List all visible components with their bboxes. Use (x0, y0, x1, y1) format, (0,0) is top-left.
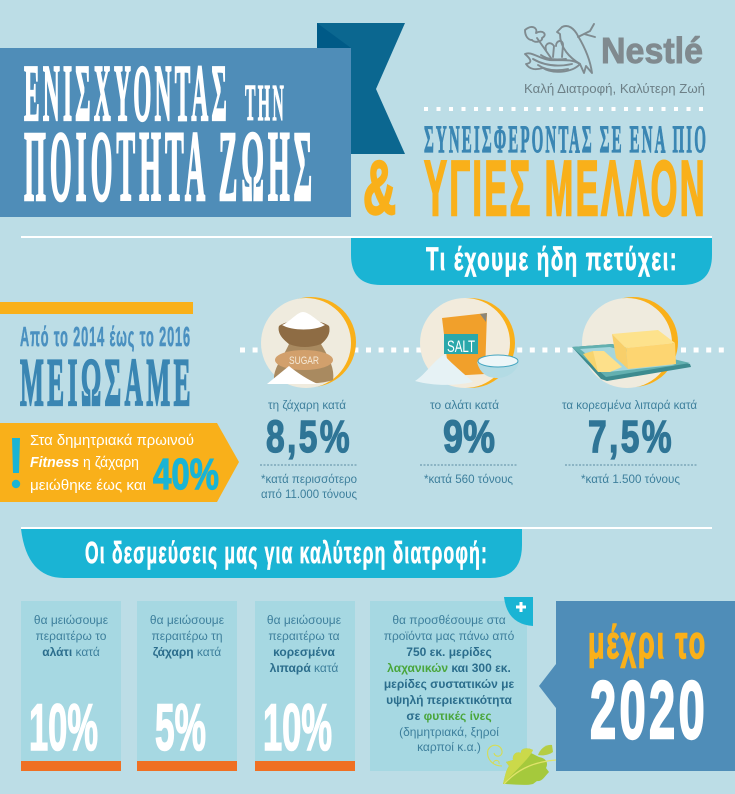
title ribbon (0, 23, 405, 222)
Nestlé logo (524, 24, 705, 96)
note: *κατά 1.500 τόνους (581, 472, 680, 486)
label: τη ζάχαρη κατά (268, 398, 346, 412)
card text (267, 613, 342, 675)
card text: λαχανικών και 300 εκ. (387, 661, 511, 675)
card text: μερίδες συστατικών με (384, 677, 514, 691)
icon: butter dish (572, 297, 691, 388)
dotted connector (240, 348, 728, 352)
card text (384, 613, 515, 754)
card text: ζάχαρη κατά (153, 645, 221, 659)
wordmark: Nestlé (601, 30, 703, 71)
item: saturated fats (562, 297, 697, 486)
card text: αλάτι κατά (42, 645, 100, 659)
card: salt commitment (21, 601, 121, 771)
card text (34, 613, 109, 659)
card text: θα μειώσουμε (34, 613, 109, 627)
card text (150, 613, 225, 659)
card text: υψηλή περιεκτικότητα (386, 693, 513, 707)
icon: salt box (415, 298, 519, 388)
icon: salt box: SALT (447, 337, 475, 356)
card text: περαιτέρω τα (268, 629, 340, 643)
figure: 8,5% (266, 411, 352, 462)
card: additions (370, 597, 533, 771)
card text: περαιτέρω τη (151, 629, 223, 643)
note: *κατά περισσότερο (261, 472, 357, 486)
title ribbon: ΕΝΙΣΧΥΟΝΤΑΣ (24, 50, 230, 138)
icon: sugar sack (261, 297, 356, 388)
item: salt (415, 298, 519, 486)
card text: προϊόντα μας πάνω από (384, 629, 515, 643)
callout text: μειώθηκε έως και (30, 478, 146, 494)
ribbon body (0, 48, 351, 217)
icon: plus tag (504, 597, 533, 626)
card text: σε φυτικές ίνες (406, 709, 492, 723)
note: *κατά 560 τόνους (424, 472, 513, 486)
icon: bird nest (525, 24, 595, 73)
orange bar (0, 302, 193, 314)
dotted separator: top (424, 107, 706, 111)
title text (24, 50, 316, 222)
label: το αλάτι κατά (430, 398, 499, 412)
card: sugar commitment (137, 601, 237, 771)
icon: sugar sack: SUGAR (289, 355, 319, 367)
callout: Fitness cereal (0, 423, 239, 502)
icon: vine leaf (488, 745, 556, 785)
text: Από το 2014 έως το 2016 (20, 321, 191, 352)
card text: 750 εκ. μερίδες (406, 645, 492, 659)
ribbon tail (317, 23, 405, 154)
card text: περαιτέρω το (36, 629, 107, 643)
card figure: 10% (263, 690, 332, 764)
card text: καρποί κ.α.) (417, 740, 481, 754)
item: sugar (260, 297, 357, 501)
card text: (δημητριακά, ξηροί (399, 725, 499, 739)
card text: θα προσθέσουμε στα (392, 613, 506, 627)
ampersand: & (363, 146, 396, 231)
card text: θα μειώσουμε (150, 613, 225, 627)
callout text: Στα δημητριακά πρωινού (30, 433, 194, 449)
banner: commitments (21, 527, 712, 578)
card figure: 5% (155, 690, 206, 764)
panel: reduced (0, 302, 194, 420)
note (261, 472, 357, 501)
note: από 11.000 τόνους (261, 487, 357, 501)
panel: until 2020 (539, 601, 735, 771)
card text: λιπαρά κατά (270, 661, 338, 675)
callout figure: 40% (153, 450, 219, 499)
title text: ΤΗΝ (245, 75, 286, 132)
icon: exclamation mark (12, 438, 20, 488)
callout text (30, 433, 194, 494)
figure: 7,5% (588, 411, 674, 462)
card figure: 10% (29, 690, 98, 764)
callout text: Fitness η ζάχαρη (30, 455, 139, 471)
heading: healthier future (363, 118, 708, 232)
figure: 9% (443, 411, 495, 462)
label: τα κορεσμένα λιπαρά κατά (562, 398, 697, 412)
card: fats commitment (255, 601, 355, 771)
tagline: Καλή Διατροφή, Καλύτερη Ζωή (524, 82, 705, 96)
text: ΜΕΙΩΣΑΜΕ (20, 344, 194, 420)
card text: κορεσμένα (273, 645, 335, 659)
card text: θα μειώσουμε (267, 613, 342, 627)
banner: achievements (21, 236, 712, 285)
